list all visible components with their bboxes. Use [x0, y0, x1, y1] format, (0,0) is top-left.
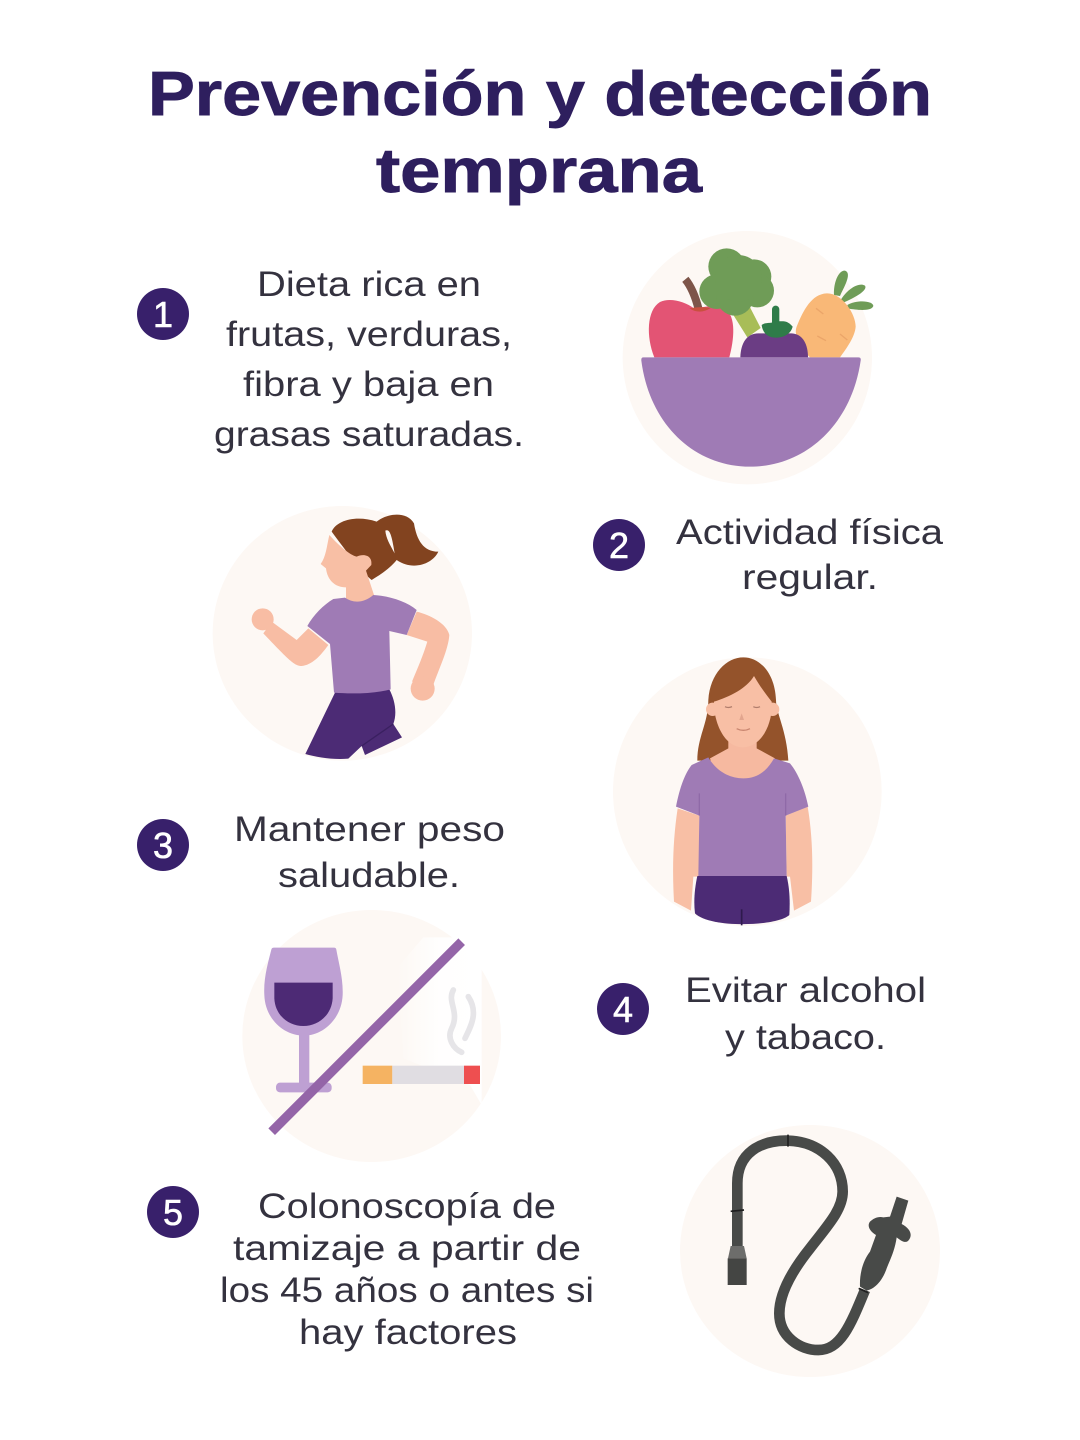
item 1: text: fibra y baja en — [243, 365, 494, 404]
item 3: text: Mantener peso — [234, 810, 505, 849]
cigarette — [363, 1066, 480, 1084]
flexible tube — [737, 1141, 865, 1350]
item 5: text: Colonoscopía de — [258, 1187, 556, 1226]
face and neck — [706, 676, 779, 790]
shorts — [694, 876, 790, 925]
bowl — [641, 357, 861, 467]
tube tip — [728, 1246, 747, 1285]
item 1: text: grasas saturadas. — [214, 415, 524, 454]
item 1: number badge — [137, 288, 189, 340]
item 2: text: regular. — [742, 558, 878, 597]
prohibition slash — [272, 942, 462, 1132]
shorts — [305, 689, 402, 759]
item 2: text: Actividad física — [676, 513, 944, 552]
tube marks — [731, 1135, 868, 1293]
item 3: text: saludable. — [278, 856, 460, 895]
hair and face — [321, 515, 438, 603]
icon: colonoscope — [680, 1125, 940, 1377]
item 1: text: Dieta rica en — [257, 265, 481, 304]
title: Prevención y detección — [148, 60, 932, 129]
item 2: text — [676, 513, 944, 597]
item 5: text: tamizaje a partir de — [233, 1229, 581, 1268]
handle — [860, 1197, 911, 1291]
item 1: text: frutas, verduras, — [226, 315, 512, 354]
right arm — [407, 612, 449, 701]
broccoli — [699, 248, 774, 337]
apple — [649, 279, 733, 357]
icon: no alcohol and no tobacco — [242, 910, 501, 1162]
item 4: text — [685, 971, 926, 1057]
item 4: number badge: 4 — [613, 989, 633, 1030]
item 4: number badge — [597, 983, 649, 1035]
shirt — [676, 757, 808, 877]
beet — [740, 309, 808, 357]
left arm — [252, 608, 328, 666]
item 3: number badge — [137, 819, 189, 871]
arms — [673, 807, 812, 911]
smoke — [450, 990, 473, 1052]
icon: bowl of fruit and vegetables — [623, 231, 873, 484]
item 4: text: Evitar alcohol — [685, 971, 926, 1010]
hair — [697, 657, 788, 761]
title: temprana — [376, 137, 703, 206]
item 2: number badge — [593, 519, 645, 571]
item 1: number badge: 1 — [153, 294, 173, 335]
icon: woman standing — [613, 657, 882, 926]
carrot — [796, 271, 873, 357]
item 4: text: y tabaco. — [725, 1018, 886, 1057]
icon: woman running — [213, 506, 472, 761]
title — [148, 60, 932, 206]
item 5: text — [220, 1187, 594, 1352]
item 1: text — [214, 265, 524, 454]
item 5: number badge: 5 — [163, 1192, 183, 1233]
item 3: text — [234, 810, 505, 895]
shirt — [307, 595, 417, 693]
item 3: number badge: 3 — [153, 825, 173, 866]
item 5: text: los 45 años o antes si — [220, 1271, 594, 1310]
wine glass — [264, 948, 343, 1092]
item 5: number badge — [147, 1186, 199, 1238]
item 2: number badge: 2 — [609, 525, 629, 566]
item 5: text: hay factores — [299, 1313, 517, 1352]
